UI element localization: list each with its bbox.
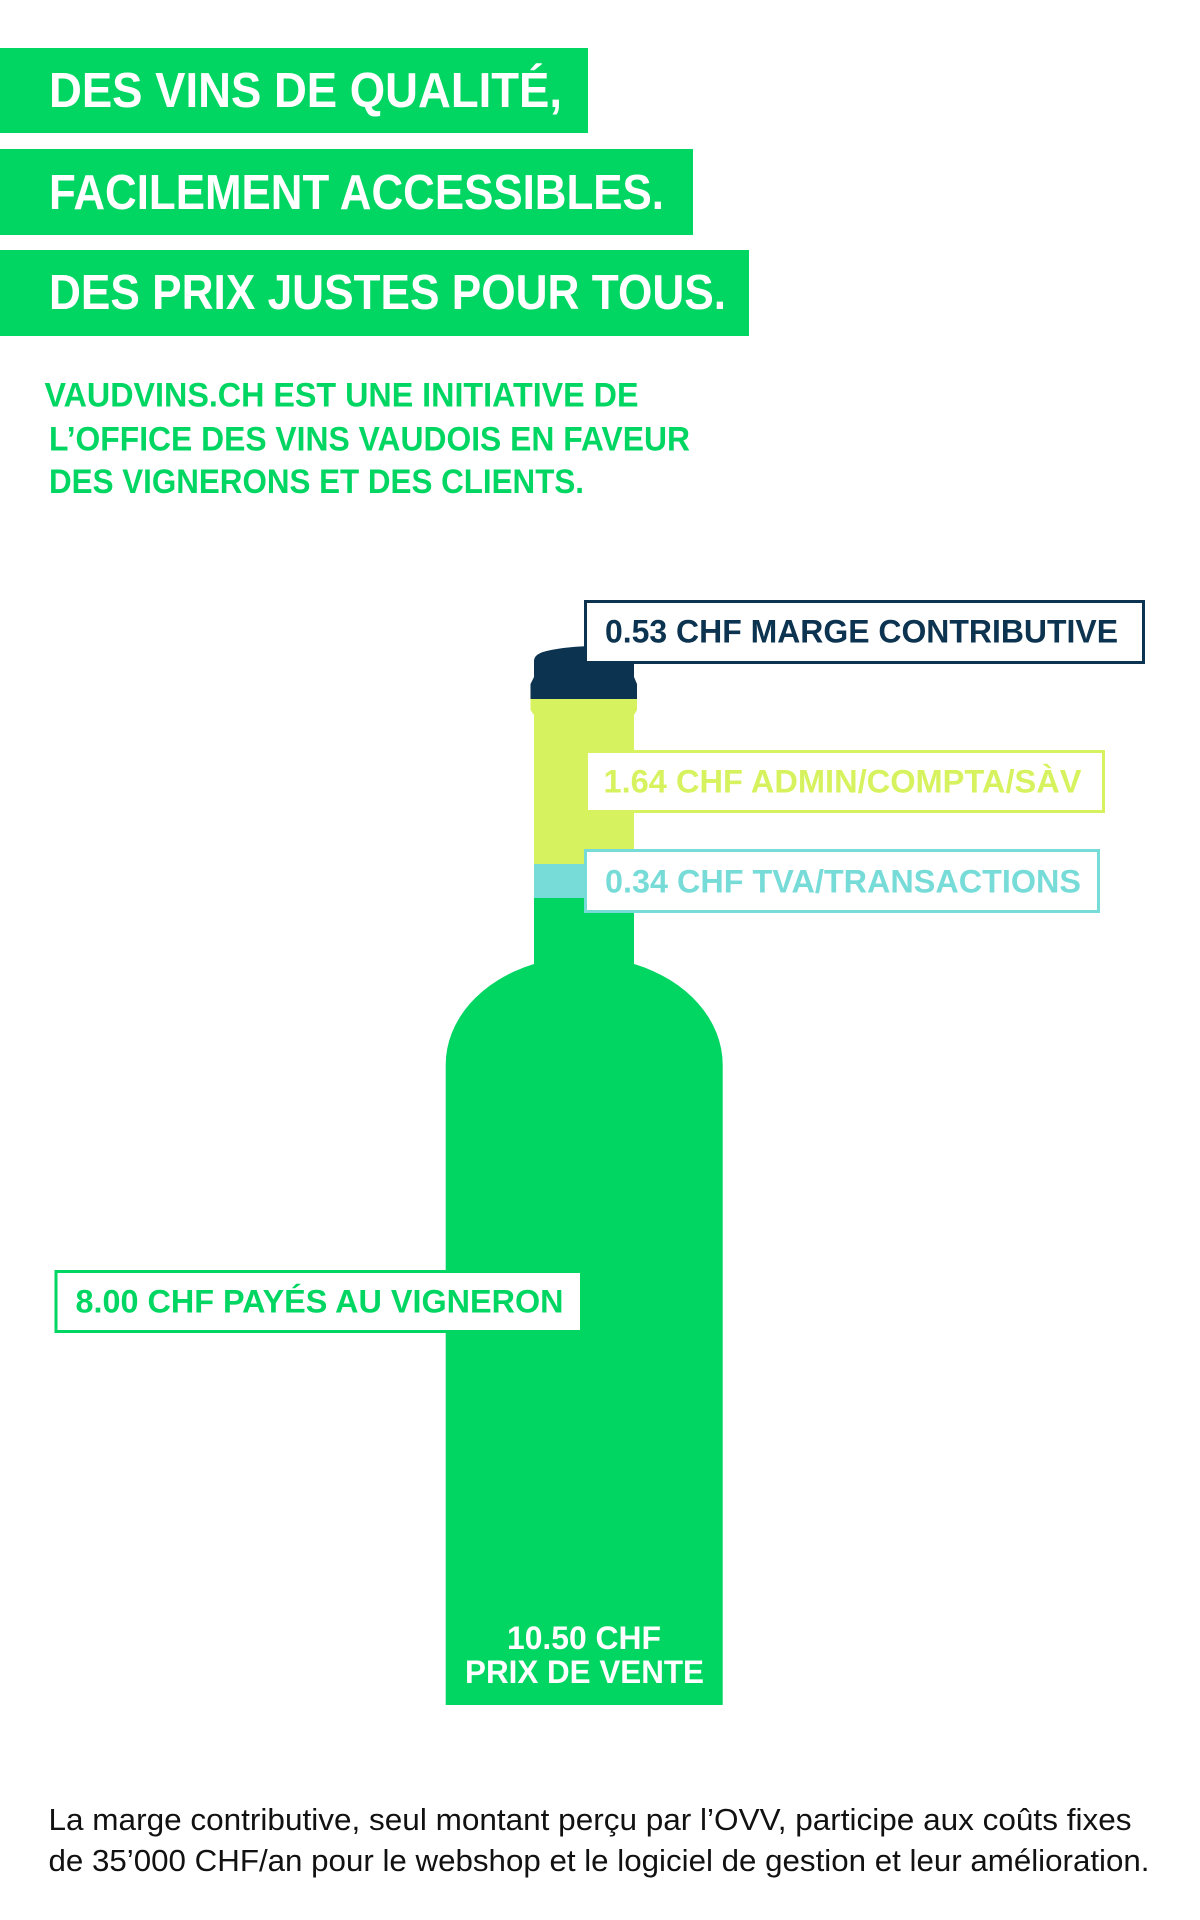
- callout: tva: [586, 850, 1098, 912]
- bottle body: green segment: [446, 898, 723, 1705]
- text block: footnote: [48, 1802, 1150, 1878]
- title: header banners: [0, 48, 749, 336]
- bottle segment: lime: [530, 699, 637, 864]
- text block: intro: L’OFFICE DES VINS VAUDOIS EN FAVEUR: [49, 420, 690, 458]
- callout: vigneron: 8.00 CHF PAYÉS AU VIGNERON: [76, 1284, 564, 1320]
- callout: admin: 1.64 CHF ADMIN/COMPTA/SÀV: [604, 764, 1082, 800]
- bottle segment: navy cap: [530, 646, 637, 699]
- bottle segment: teal: [534, 864, 634, 898]
- callout: marge contributive: [586, 602, 1144, 662]
- text block: footnote: de 35’000 CHF/an pour le webshop et le logiciel de gestion et leur amélioration.: [48, 1843, 1150, 1878]
- text block: intro: VAUDVINS.CH EST UNE INITIATIVE DE: [44, 376, 638, 414]
- callout: vigneron: [56, 1272, 582, 1332]
- chart: bottle: [446, 646, 723, 1705]
- banner: line 3: [0, 250, 749, 336]
- text: selling price: 10.50 CHF: [507, 1620, 661, 1656]
- text: selling price: PRIX DE VENTE: [465, 1654, 704, 1690]
- banner: line 1: DES VINS DE QUALITÉ,: [49, 64, 562, 118]
- text block: intro: [44, 376, 690, 501]
- banner: line 1: [0, 48, 588, 133]
- banner: line 3: DES PRIX JUSTES POUR TOUS.: [49, 266, 726, 320]
- banner: line 2: FACILEMENT ACCESSIBLES.: [49, 166, 664, 220]
- text: selling price: [465, 1620, 704, 1690]
- banner: line 2: [0, 149, 693, 235]
- text block: intro: DES VIGNERONS ET DES CLIENTS.: [49, 463, 584, 501]
- callout: admin: [586, 752, 1104, 812]
- callout: marge contributive: 0.53 CHF MARGE CONTRIBUTIVE: [605, 614, 1118, 650]
- callout: tva: 0.34 CHF TVA/TRANSACTIONS: [605, 864, 1081, 900]
- text block: footnote: La marge contributive, seul montant perçu par l’OVV, participe aux coûts fixes: [48, 1802, 1132, 1837]
